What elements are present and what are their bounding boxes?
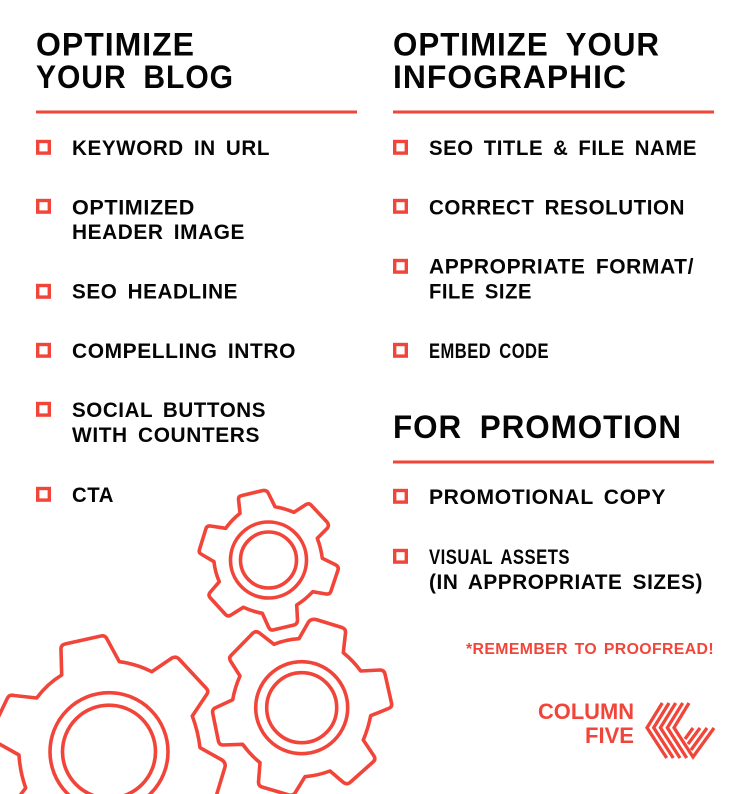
panel: for promotion [393,409,714,594]
logo wordmark: COLUMN [538,699,634,724]
logo mark: chevrons [647,703,714,758]
heading: optimize your blog: YOUR BLOG [36,59,234,95]
heading: optimize your infographic: OPTIMIZE YOUR [393,26,660,62]
checklist item: SEO title and file name: SEO TITLE & FILE NAME [429,136,697,160]
callout: remember to proofread: *REMEMBER TO PROOFREAD! [466,641,714,658]
panel: optimize your blog [36,26,357,507]
panel: optimize your infographic [393,26,714,363]
heading: for promotion: FOR PROMOTION [393,409,682,445]
checklist item: SEO headline: SEO HEADLINE [72,280,238,304]
checklist item: appropriate format and file size: FILE SIZE [429,280,532,304]
heading rule [393,110,714,114]
checklist item: optimized header image [38,196,245,244]
checklist item: visual assets [395,545,703,594]
logo wordmark: FIVE [585,723,634,748]
checklist item: CTA [38,483,114,507]
heading: optimize your blog [36,26,234,95]
icon: small gear [199,490,338,630]
heading rule [393,460,714,464]
checklist item: visual assets: (IN APPROPRIATE SIZES) [429,570,703,594]
checklist item: social buttons with counters: SOCIAL BUTTONS [72,398,266,422]
heading rule [36,110,357,114]
checklist item: appropriate format and file size [395,254,694,304]
icon: medium gear [213,619,392,794]
checklist item: keyword in URL: KEYWORD IN URL [72,136,270,160]
checklist item: embed code [395,339,549,363]
checklist item: optimized header image: HEADER IMAGE [72,220,245,244]
checklist item: social buttons with counters [38,398,266,447]
logo: column five [538,699,714,758]
checklist item: social buttons with counters: WITH COUNTERS [72,423,260,447]
heading: optimize your blog: OPTIMIZE [36,26,195,62]
checklist item: correct resolution: CORRECT RESOLUTION [429,196,685,220]
heading: optimize your infographic: INFOGRAPHIC [393,59,627,95]
checklist item: visual assets: VISUAL ASSETS [429,545,570,569]
checklist item: embed code: EMBED CODE [429,339,549,363]
icon: large gear [0,636,225,794]
heading: optimize your infographic [393,26,660,95]
checklist item: optimized header image: OPTIMIZED [72,196,195,220]
checklist item: appropriate format and file size: APPROPRIATE FORMAT/ [429,254,694,278]
checklist item: compelling intro: COMPELLING INTRO [72,339,296,363]
checklist item: CTA: CTA [72,483,114,507]
checklist item: promotional copy: PROMOTIONAL COPY [429,485,666,509]
logo wordmark [538,699,634,748]
